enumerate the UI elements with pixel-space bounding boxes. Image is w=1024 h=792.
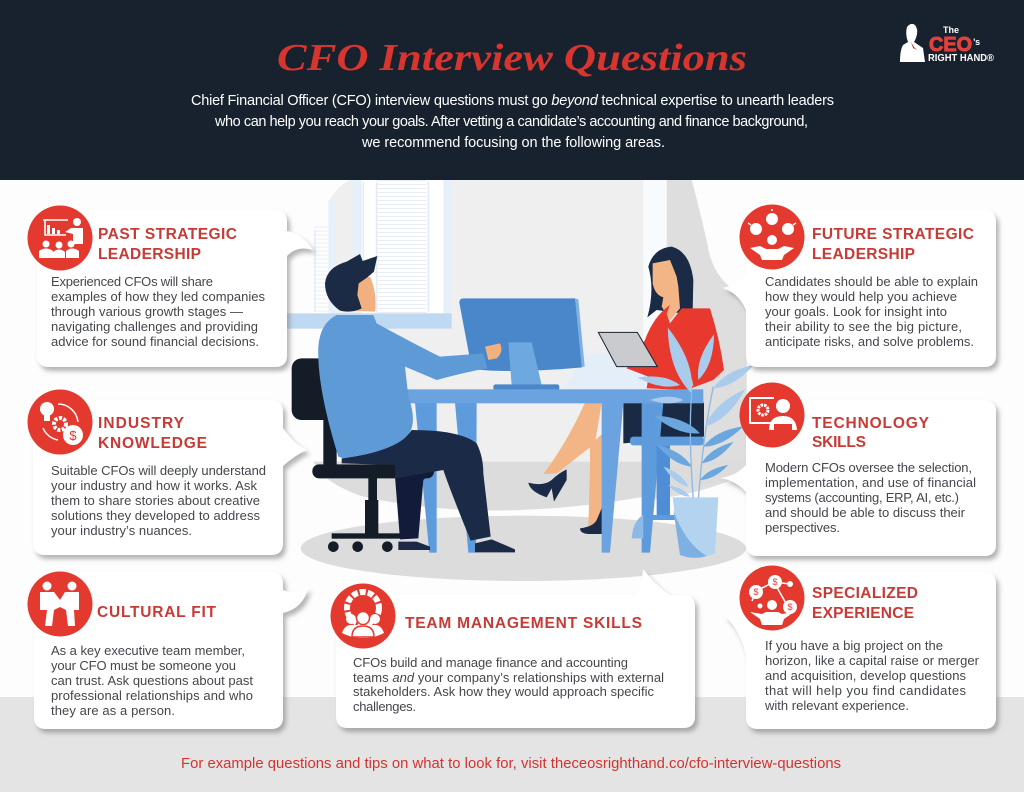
body text: systems (accounting, ERP, AI, etc.) xyxy=(765,490,959,505)
body text: stakeholders. Ask how they would approach specific xyxy=(353,684,654,699)
icon: team and gear xyxy=(330,584,396,648)
near table leg xyxy=(602,403,623,553)
body text: how they would help you achieve xyxy=(765,289,957,304)
body text: If you have a big project on the xyxy=(765,638,943,653)
heading: EXPERIENCE xyxy=(812,605,914,622)
body text: with relevant experience. xyxy=(764,698,909,713)
icon: money network: $ xyxy=(772,577,778,587)
intro text: Chief Financial Officer (CFO) interview questions must go beyond technical expertise to unearth leaders xyxy=(191,93,834,109)
body text: Suitable CFOs will deeply understand xyxy=(51,463,266,478)
icon: bulb gear dollar xyxy=(28,390,92,454)
logo xyxy=(900,24,994,64)
body text: navigating challenges and providing xyxy=(51,319,258,334)
body text: Candidates should be able to explain xyxy=(765,274,978,289)
heading xyxy=(812,585,918,622)
tablet xyxy=(598,332,657,367)
intro text: we recommend focusing on the following areas. xyxy=(361,135,665,151)
heading: SKILLS xyxy=(812,434,866,451)
heading xyxy=(98,415,207,452)
body text: teams and your company’s relationships with external xyxy=(353,670,664,685)
body text: your CFO must be someone you xyxy=(51,658,236,673)
icon: money network xyxy=(740,566,804,630)
heading: LEADERSHIP xyxy=(812,246,915,263)
body text: Experienced CFOs will share xyxy=(51,274,213,289)
far table leg and woman's chair xyxy=(630,403,704,553)
heading: TECHNOLOGY xyxy=(812,415,930,432)
icon: bulb gear dollar: $ xyxy=(69,428,77,443)
body text: implementation, and use of financial xyxy=(765,475,976,490)
body text: and should be able to discuss their xyxy=(765,505,966,520)
body text: and acquisition, develop questions xyxy=(765,668,966,683)
table legs left xyxy=(415,403,477,553)
heading: PAST STRATEGIC xyxy=(98,226,237,243)
panel: past strategic leadership xyxy=(28,206,313,367)
room background xyxy=(287,180,747,511)
body text: they are as a person. xyxy=(51,703,175,718)
body text xyxy=(765,460,976,535)
body text xyxy=(353,655,664,714)
body text: can trust. Ask questions about past xyxy=(51,673,253,688)
body text xyxy=(51,643,253,718)
body text: your industry’s nuances. xyxy=(51,523,192,538)
logo: CEO xyxy=(929,34,972,56)
body text: that will help you find candidates xyxy=(765,683,966,698)
body text: CFOs build and manage finance and accounting xyxy=(353,655,628,670)
heading: SPECIALIZED xyxy=(812,585,918,602)
woman xyxy=(528,247,724,534)
heading xyxy=(98,226,237,263)
footer call to action: For example questions and tips on what to look for, visit theceosrighthand.co/cfo-interview-questions xyxy=(181,756,841,772)
intro text: who can help you reach your goals. After vetting a candidate’s accounting and finance background, xyxy=(214,114,808,130)
icon: ideas xyxy=(740,204,804,270)
title: CFO Interview Questions xyxy=(277,37,747,79)
body text: horizon, like a capital raise or merger xyxy=(765,653,980,668)
body text xyxy=(51,274,266,349)
panel: industry knowledge xyxy=(28,390,307,555)
monitor xyxy=(459,298,585,390)
body text: anticipate risks, and solve problems. xyxy=(765,334,974,349)
icon: presentation xyxy=(28,206,92,270)
body text: professional relationships and who xyxy=(51,688,253,703)
body text xyxy=(765,274,978,349)
heading: TEAM MANAGEMENT SKILLS xyxy=(405,615,642,632)
body text: advice for sound financial decisions. xyxy=(51,334,259,349)
body text: them to share stories about creative xyxy=(51,493,260,508)
body text: their ability to see the big picture, xyxy=(765,319,962,334)
body text: examples of how they led companies xyxy=(51,289,266,304)
icon: money network: $ xyxy=(753,587,759,597)
office scene illustration xyxy=(287,180,756,581)
body text: your industry and how it works. Ask xyxy=(51,478,258,493)
man's chair xyxy=(292,358,434,552)
heading xyxy=(812,226,974,263)
body text: perspectives. xyxy=(765,520,840,535)
icon: money network: $ xyxy=(787,602,793,612)
icon: two people handshake xyxy=(28,572,92,636)
header band xyxy=(0,0,1024,180)
heading: KNOWLEDGE xyxy=(98,435,207,452)
panel: future strategic leadership xyxy=(722,204,996,367)
logo: The xyxy=(943,25,959,35)
panel: cultural fit xyxy=(28,572,308,729)
body text: Modern CFOs oversee the selection, xyxy=(765,460,972,475)
body text: solutions they developed to address xyxy=(51,508,260,523)
table top xyxy=(407,389,703,403)
logo: RIGHT HAND® xyxy=(928,52,994,64)
floor shadow xyxy=(301,516,746,581)
heading: INDUSTRY xyxy=(98,415,185,432)
heading: CULTURAL FIT xyxy=(97,604,217,621)
panel: specialized experience xyxy=(724,566,996,729)
intro text xyxy=(191,93,834,151)
heading: FUTURE STRATEGIC xyxy=(812,226,974,243)
body text: your goals. Look for insight into xyxy=(765,304,947,319)
icon: computer user xyxy=(740,382,804,448)
heading xyxy=(812,415,930,451)
body text: challenges. xyxy=(353,699,416,714)
heading: LEADERSHIP xyxy=(98,246,201,263)
plant xyxy=(637,325,756,558)
body text: through various growth stages — xyxy=(51,304,243,319)
body text xyxy=(51,463,266,538)
body text: As a key executive team member, xyxy=(51,643,245,658)
panel: technology skills xyxy=(720,382,996,556)
panel: team management skills xyxy=(330,569,695,728)
body text xyxy=(764,638,980,713)
logo: ’s xyxy=(973,37,980,47)
man xyxy=(318,254,515,552)
